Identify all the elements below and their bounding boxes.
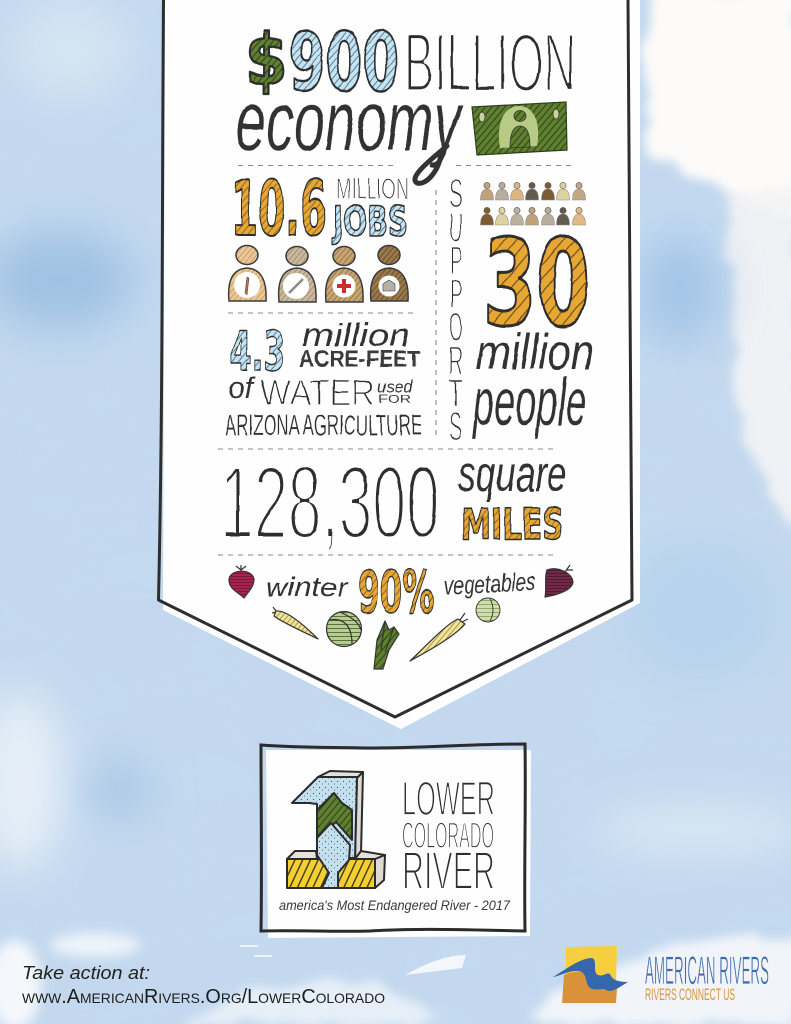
vertical word: supports: R: [448, 339, 463, 383]
icon: number one river: [287, 771, 385, 888]
icon: right carrot: [410, 613, 468, 661]
worker: tools: [279, 246, 316, 302]
panel: white banner: [158, 0, 640, 729]
icon: cabbage: [326, 612, 362, 646]
word: miles: MILES: [461, 500, 564, 550]
word: million: million: [476, 324, 594, 380]
dollar sign: $: [245, 19, 288, 101]
logo: american rivers: [553, 946, 769, 1004]
text: U: [449, 206, 463, 250]
worker: home: [371, 246, 408, 301]
stat: 10.6 million jobs: [231, 164, 409, 253]
worker: health: [326, 246, 363, 302]
number 10.6: 10.6: [231, 164, 327, 253]
word: square: square: [458, 446, 567, 502]
word: for: FOR: [378, 392, 411, 406]
text: O: [449, 305, 463, 349]
stat: 4.3 million acre-feet: [225, 317, 422, 442]
stat: 128,300 square miles: [220, 445, 567, 561]
tagline: america's Most Endangered River - 2017: [279, 897, 511, 913]
vertical word: supports: [448, 172, 463, 449]
dividers: [218, 166, 574, 555]
text: P: [450, 272, 463, 316]
icon: left carrot: [272, 607, 318, 639]
word: million: million: [302, 317, 410, 353]
panel: lower colorado river badge: COLORADO: [402, 815, 494, 856]
word: people: people: [472, 364, 587, 440]
icon: small cabbage: [476, 598, 500, 622]
icon: dollar bill: [472, 102, 567, 155]
word: of: of: [228, 372, 256, 405]
word: arizona agriculture: ARIZONA AGRICULTURE: [225, 410, 422, 442]
word: million: MILLION: [336, 171, 409, 206]
number 900: 900: [289, 16, 399, 109]
word: used: used: [377, 377, 413, 396]
word: river: RIVER: [402, 841, 495, 901]
heading: $900 billion economy: [235, 16, 576, 168]
word: acre-feet: ACRE-FEET: [299, 346, 420, 373]
word: vegetables: vegetables: [443, 568, 536, 600]
word: jobs: JOBS: [331, 197, 408, 246]
logo mark: [553, 946, 628, 1003]
stat: 30 million people: [472, 215, 594, 440]
vertical word: supports: S: [449, 172, 463, 216]
line: take action: Take action at:: [22, 963, 150, 983]
word: lower: LOWER: [402, 773, 495, 826]
panel: lower colorado river badge: [261, 744, 531, 938]
icon: leek: [374, 621, 399, 669]
vertical word: supports: T: [448, 372, 463, 416]
vertical word: supports: S: [449, 405, 462, 449]
word: water: WATER: [260, 372, 375, 413]
icon: purple beet: [545, 565, 573, 597]
line: website: www.AmericanRivers.Org/LowerColorado: [22, 986, 385, 1008]
number 128,300: 128,300: [220, 445, 440, 561]
text: P: [450, 239, 463, 283]
worker: farming: [229, 246, 266, 301]
word: billion: BILLION: [404, 16, 576, 109]
icon row: four workers: [229, 246, 408, 302]
icon: economy y tail: [415, 146, 447, 183]
number 4.3: 4.3: [230, 320, 285, 383]
stat: 90% winter vegetables: [266, 558, 536, 626]
call to action: [22, 963, 385, 1008]
word: economy: economy: [235, 74, 464, 168]
icon: red beet: [229, 565, 254, 598]
icons: vegetables: [229, 565, 573, 669]
number 30: 30: [483, 215, 590, 354]
number 90%: 90%: [358, 558, 434, 626]
word: winter: winter: [266, 572, 348, 602]
icon grid: small people: [480, 182, 586, 225]
